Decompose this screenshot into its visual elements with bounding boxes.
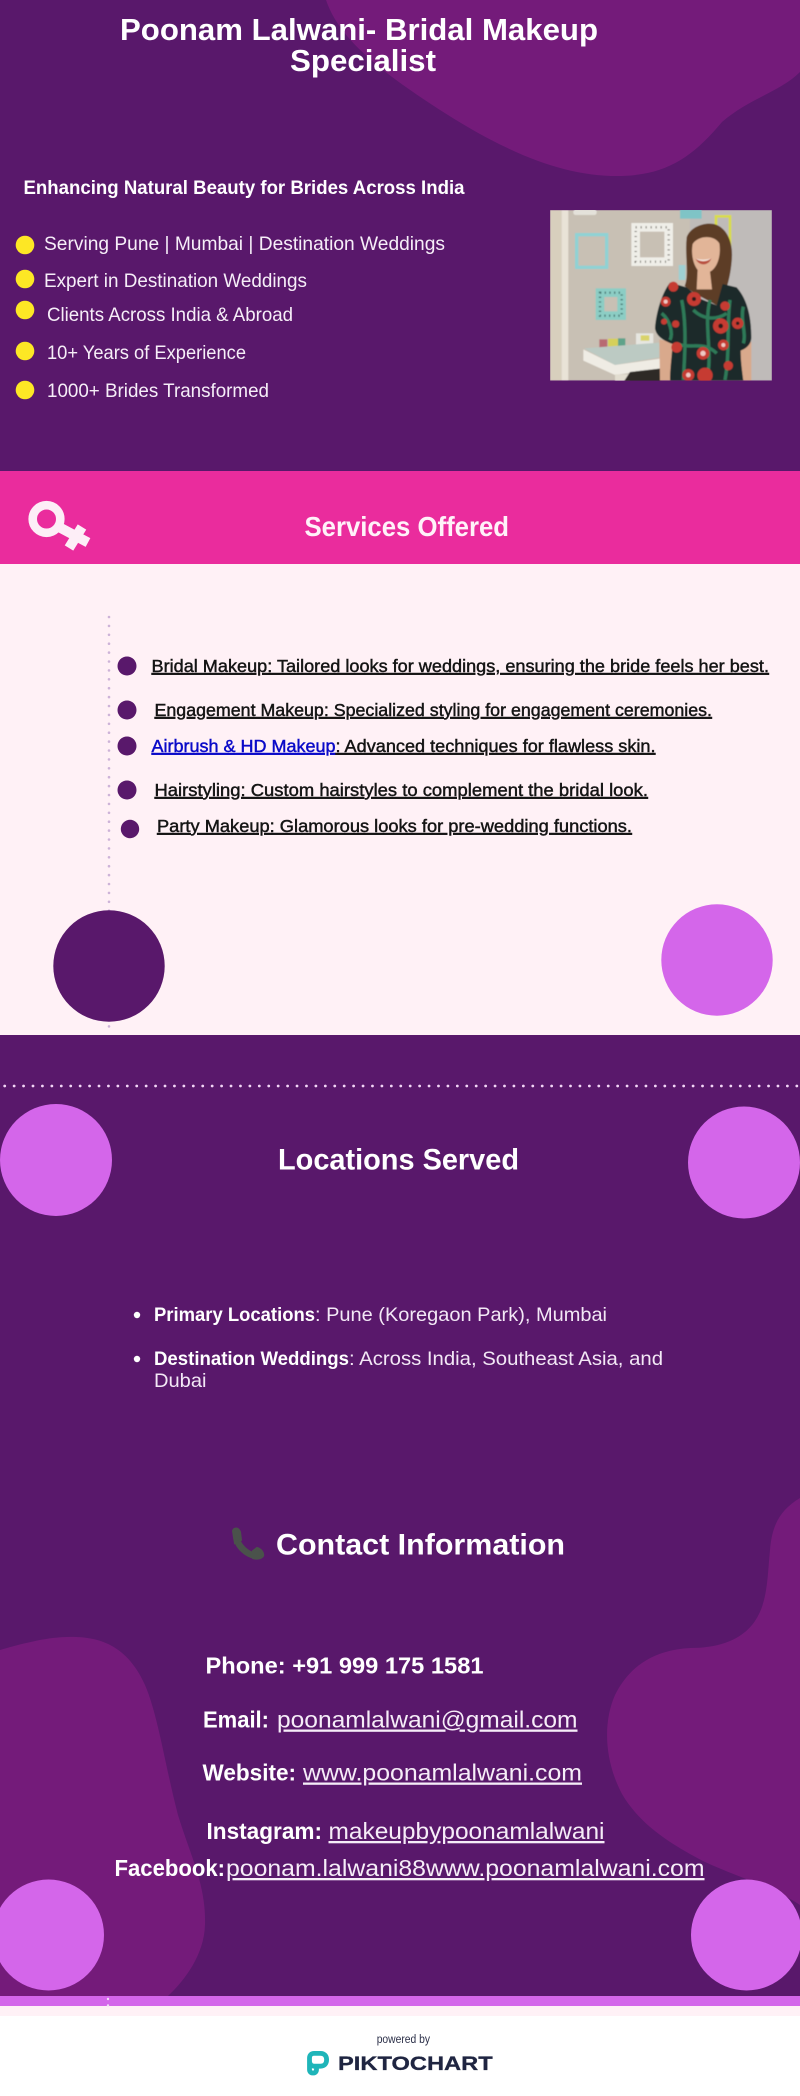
services list [118,656,769,838]
powered by: powered by [377,2034,430,2046]
service: airbrush and HD makeup [118,736,656,756]
contact: email: poonamlalwani@gmail.com [277,1706,578,1732]
contact heading [233,1528,565,1562]
footer bar [0,1996,800,2016]
location: primary: Primary Locations [154,1304,315,1326]
decorative blob: right [607,1498,800,1905]
contact: facebook: Facebook: [114,1855,225,1881]
contact: instagram: makeupbypoonamlalwani [328,1818,604,1844]
title: Poonam Lalwani- Bridal Makeup [120,12,598,47]
location: destination weddings: Destination Weddings [154,1348,349,1370]
locations heading: Locations Served [278,1144,519,1176]
services header band [0,471,800,564]
service: engagement makeup: Engagement Makeup: Specialized styling for engagement ceremonies. [154,700,712,720]
panel: contact information [0,1498,800,1996]
dress flowers [661,282,743,383]
Piktochart wordmark: PIKTOCHART [338,2054,493,2075]
panel: hero [0,0,800,471]
decorative circle: right [688,1106,800,1218]
highlight: experience: 10+ Years of Experience [47,342,246,364]
location: destination weddings: : Across India, Southeast Asia, and [349,1348,663,1370]
tagline: Enhancing Natural Beauty for Brides Across India [24,178,465,199]
title: Specialist [290,43,436,78]
contact: facebook: poonam.lalwani88www.poonamlalwani.com [226,1855,704,1881]
service: airbrush and HD makeup: Airbrush & HD Makeup [152,736,336,756]
service: party makeup: Party Makeup: Glamorous looks for pre-wedding functions. [157,816,632,836]
hair [685,224,732,305]
title [120,12,598,78]
decorative circle: dark [53,910,165,1022]
panel: services offered [0,471,800,1035]
service: bridal makeup: Bridal Makeup: Tailored looks for weddings, ensuring the bride feels her best. [152,656,769,676]
contact: email: Email: [203,1706,269,1732]
panel: locations and contact background [0,1035,800,1996]
arms [659,339,673,381]
panel: locations served [0,1104,800,1392]
dress foliage [662,300,744,380]
location: destination weddings [134,1348,663,1392]
footer: Piktochart branding [310,2034,493,2075]
highlight: expert: Expert in Destination Weddings [44,270,307,292]
icon: telephone handset [233,1528,263,1559]
decorative blob: top right [326,0,800,176]
location: destination weddings: Dubai [154,1370,206,1392]
highlight: serving: Serving Pune | Mumbai | Destination Weddings [44,233,445,255]
highlights list [16,233,445,402]
decorative circle: light [661,904,773,1016]
contact: instagram: Instagram: [206,1818,322,1844]
location: primary [134,1304,607,1326]
decorative circle: left [0,1104,112,1216]
services body background [0,564,800,1035]
highlight: brides: 1000+ Brides Transformed [47,380,269,402]
location: primary: : Pune (Koregaon Park), Mumbai [315,1304,607,1326]
highlight: clients: Clients Across India & Abroad [47,304,293,326]
dress [655,283,751,381]
decorative blob: left [0,1637,205,1996]
face and neck [692,237,720,289]
contact: phone: Phone: +91 999 175 1581 [206,1652,484,1678]
contact: website: Website: [202,1760,296,1786]
service: airbrush and HD makeup: : Advanced techniques for flawless skin. [336,736,656,756]
contact title: Contact Information [276,1528,565,1562]
icon: female symbol [33,505,88,548]
decorative circle: bottom left [0,1880,104,1990]
services heading: Services Offered [304,511,509,542]
decorative circle: bottom right [691,1880,800,1990]
contact: website [202,1760,582,1786]
service: hairstyling: Hairstyling: Custom hairstyles to complement the bridal look. [154,780,648,800]
photo: Poonam Lalwani in studio [550,209,772,383]
contact: website: www.poonamlalwani.com [302,1760,582,1786]
icon: Piktochart logo [310,2053,327,2073]
contact: instagram [206,1818,604,1844]
